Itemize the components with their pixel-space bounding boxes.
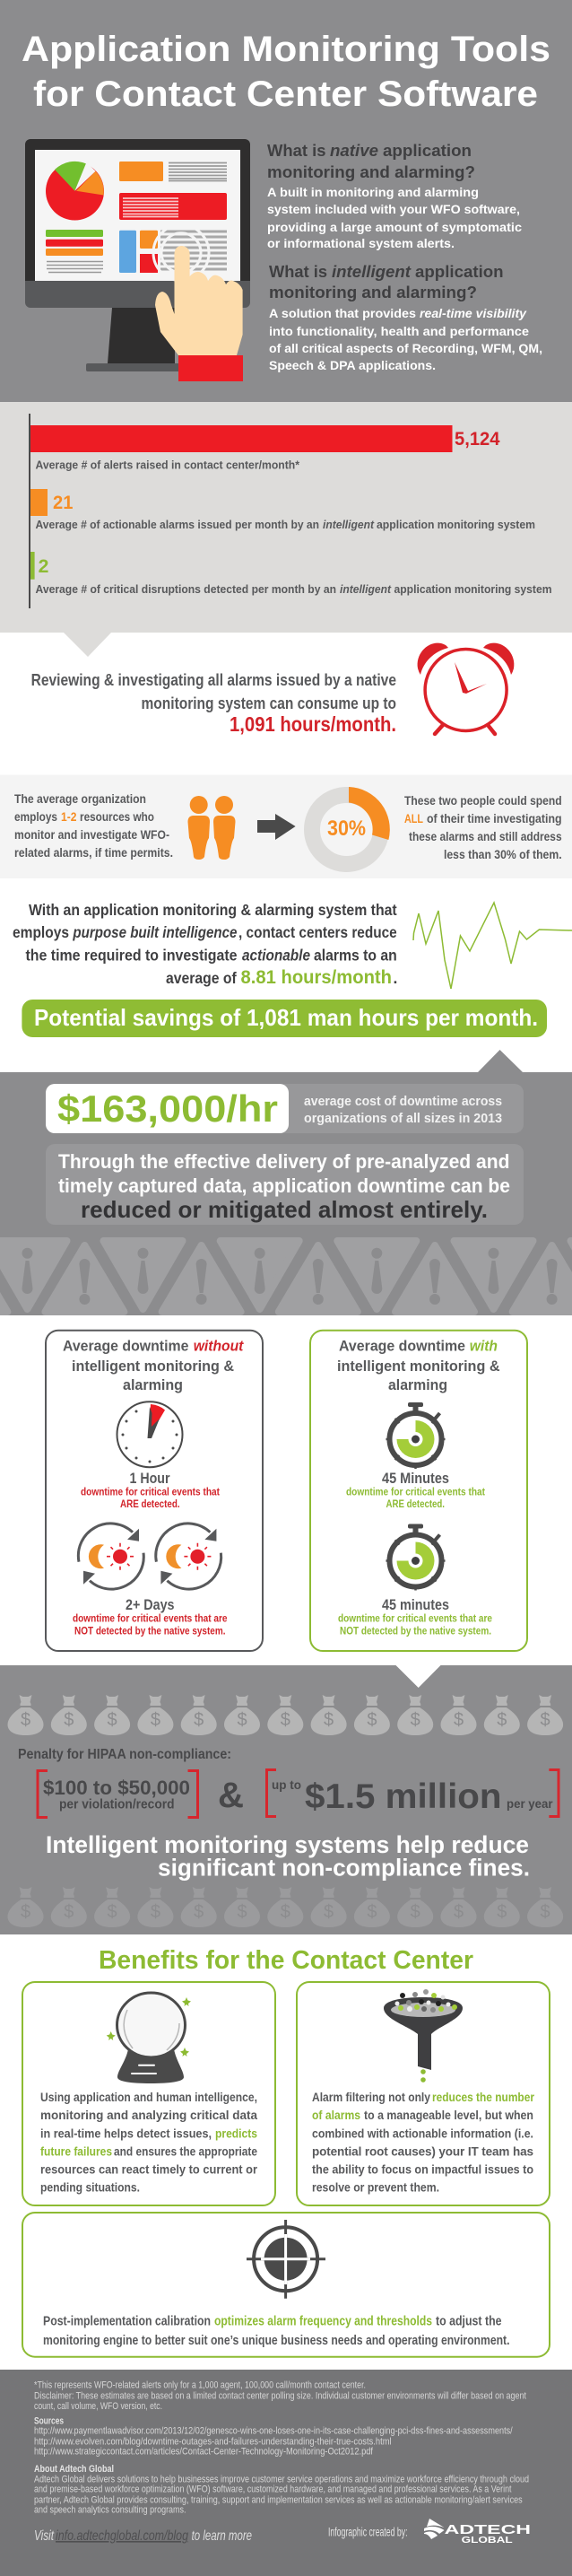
text block: what is intelligent: application: [415, 263, 504, 281]
pattern: money bags bottom row: $: [281, 1902, 290, 1922]
pattern: money bags top row: [7, 1695, 563, 1735]
text: reduces alarms: the ability to focus on impactful issues to: [312, 2163, 533, 2177]
pattern: money bags top row: $: [497, 1710, 507, 1730]
text: two people could spend: [404, 794, 562, 861]
pattern: money bags bottom row: [7, 1887, 563, 1927]
pattern: money bags top row: $: [21, 1710, 30, 1730]
title: [22, 30, 550, 114]
callout: reduced or mitigated: Through the effective delivery of pre-analyzed and: [58, 1150, 509, 1173]
text: human intelligence: and ensures the appropriate: [114, 2145, 257, 2159]
statement: reduce fines: significant non-compliance fines.: [158, 1855, 530, 1882]
text block: purpose built intelligence: the time required to investigate: [25, 947, 238, 965]
text: reduces alarms: potential root causes) your IT team has: [312, 2145, 533, 2159]
text: reduces alarms: reduces the number: [432, 2091, 535, 2104]
ampersand: &: [218, 1776, 244, 1815]
callout: reduced or mitigated: reduced or mitigated almost entirely.: [81, 1196, 488, 1223]
text: human intelligence: Using application and human intelligence,: [40, 2091, 257, 2104]
heading: without: [194, 1338, 245, 1355]
text: two people could spend: less than 30% of them.: [444, 848, 562, 861]
bar: 21 actionable alarms: Average # of actionable alarms issued per month by an: [36, 518, 319, 531]
pattern: money bags bottom row: $: [194, 1902, 204, 1922]
bar: 21 actionable alarms: intelligent: [323, 518, 375, 531]
sources text: [34, 2416, 513, 2458]
pattern: money bags top row: $: [194, 1710, 204, 1730]
text: post-implementation calibration: optimizes alarm frequency and thresholds: [214, 2314, 432, 2329]
stat: per violation penalty: per violation/record: [59, 1798, 174, 1812]
pattern: money bags bottom row: $: [454, 1902, 464, 1922]
text: human intelligence: predicts: [215, 2127, 257, 2141]
about text: [34, 2464, 529, 2516]
pattern: money bags top row: $: [108, 1710, 117, 1730]
title: for Contact Center Software: [33, 74, 538, 114]
text: reduces alarms: of alarms: [312, 2109, 360, 2122]
pattern: money bags top row: $: [281, 1710, 290, 1730]
text block: purpose built intelligence: .: [393, 969, 397, 987]
stat: per year penalty: per year: [507, 1796, 553, 1811]
text: reduces alarms: combined with actionable information (i.e.: [312, 2127, 533, 2141]
text block: what is intelligent: What is: [269, 263, 327, 281]
stat: per year penalty: up to: [272, 1778, 301, 1792]
text block: purpose built intelligence: average of: [166, 969, 237, 987]
text block: what is intelligent: real-time visibility: [420, 306, 527, 320]
panel: calibration: [22, 2213, 550, 2357]
heading: alarming: [123, 1376, 183, 1393]
pattern: money bags top row: $: [454, 1710, 464, 1730]
text: reduces alarms: [312, 2091, 535, 2195]
arrow: [257, 814, 296, 840]
stat: 2+ days: NOT detected by the native system.: [74, 1627, 226, 1637]
text: post-implementation calibration: Post-implementation calibration: [43, 2314, 211, 2329]
icon: two day-night cycles: [78, 1524, 221, 1589]
call to action: info.adtechglobal.com/blog: [56, 2528, 188, 2544]
text: two people could spend: ALL: [404, 812, 423, 825]
callout: 163,000 per hour: organizations of all sizes in 2013: [304, 1111, 502, 1126]
text block: what is intelligent: Speech & DPA applications.: [269, 358, 436, 372]
pattern: money bags bottom row: $: [151, 1902, 160, 1922]
bar: 2 critical disruptions: Average # of critical disruptions detected per month by an: [36, 582, 336, 596]
stat: 45 minutes not detected: NOT detected by the native system.: [340, 1627, 491, 1637]
text: reduces alarms: resolve or prevent them.: [312, 2181, 439, 2195]
bar: 5,124 alerts: Average # of alerts raised in contact center/month*: [36, 458, 300, 472]
text block: what is native: What is: [267, 142, 326, 160]
text: two people could spend: of their time investigating: [427, 812, 562, 825]
stat: 1 hour: [81, 1470, 220, 1510]
pattern: money bags top row: $: [237, 1710, 247, 1730]
stat: per violation penalty: $100 to $50,000: [43, 1777, 190, 1799]
section: header background: [0, 0, 572, 402]
sources text: Sources: [34, 2416, 64, 2427]
stat: 1 hour: 1 Hour: [129, 1470, 170, 1487]
callout: 163,000 per hour: $163,000/hr: [57, 1087, 278, 1130]
callout: reduced or mitigated: timely captured data, application downtime can be: [58, 1174, 510, 1197]
logo: Adtech Global: GLOBAL: [462, 2535, 513, 2545]
statement: reduce fines: Intelligent monitoring systems help reduce: [46, 1831, 529, 1858]
text block: 1,091 hours: [31, 671, 396, 736]
stat: 45 minutes not detected: 45 minutes: [382, 1596, 449, 1613]
text block: what is native: native: [330, 142, 378, 160]
pattern: money bags bottom row: $: [367, 1902, 377, 1922]
text: average organization: monitor and investigate WFO-: [14, 828, 169, 842]
panel: downtime with intelligent monitoring: [310, 1331, 527, 1651]
stat: 2+ days: 2+ Days: [126, 1596, 174, 1613]
text block: purpose built intelligence: With an application monitoring & alarming system that: [29, 901, 397, 919]
panel: alarm filtering: [297, 1982, 550, 2205]
sources text: http://www.evolven.com/blog/downtime-outages-and-failures-understanding-their-true-costs.html: [34, 2437, 392, 2448]
text block: what is native: providing a large amount of symptomatic: [267, 220, 522, 234]
heading: with: [470, 1338, 498, 1355]
text block: what is native: or informational system alerts.: [267, 236, 455, 250]
text block: 1,091 hours: 1,091 hours/month.: [230, 712, 396, 736]
stat: 1 hour: downtime for critical events that: [81, 1488, 220, 1498]
panel: downtime without intelligent monitoring: [46, 1331, 263, 1651]
icon: wall clock one hour: [117, 1402, 183, 1467]
heading: intelligent monitoring &: [337, 1358, 500, 1375]
heading: intelligent monitoring &: [72, 1358, 234, 1375]
chart: 30 percent donut: [312, 787, 390, 864]
pattern: money bags bottom row: $: [21, 1902, 30, 1922]
text: human intelligence: pending situations.: [40, 2181, 140, 2195]
stat: 1 hour: ARE detected.: [120, 1499, 180, 1510]
panel: alert volume bar chart: [0, 402, 572, 657]
heading: Average downtime: [339, 1338, 465, 1355]
panel: HIPAA penalties: [0, 1665, 572, 1934]
pattern: money bags top row: $: [541, 1710, 550, 1730]
bar: 21 actionable alarms: 21: [53, 493, 74, 513]
text block: what is intelligent: A solution that provides: [269, 306, 416, 320]
bar: 2 critical disruptions: 2: [39, 556, 48, 577]
icon: stopwatch 45 minutes second: [386, 1524, 445, 1590]
panel: predict failures: [22, 1982, 275, 2205]
text block: purpose built intelligence: alarms to an: [314, 947, 397, 965]
panel: cost of downtime: [0, 1050, 572, 1315]
banner: potential savings: [22, 1000, 547, 1037]
pattern: money bags bottom row: $: [237, 1902, 247, 1922]
pattern: money bags top row: $: [151, 1710, 160, 1730]
stat: 2+ days: [73, 1596, 228, 1637]
heading: Average downtime: [63, 1338, 188, 1355]
pattern: money bags top row: $: [367, 1710, 377, 1730]
heading: benefits: Benefits for the Contact Center: [99, 1946, 473, 1975]
text: post-implementation calibration: to adjust the: [436, 2314, 502, 2329]
pattern: money bags top row: $: [324, 1710, 334, 1730]
text block: purpose built intelligence: employs: [13, 923, 69, 941]
bar: 2 critical disruptions: intelligent: [340, 582, 392, 596]
icon: funnel: [384, 1989, 463, 2083]
text: human intelligence: in real-time helps detect issues,: [40, 2127, 212, 2141]
stat: 45 minutes not detected: downtime for critical events that are: [338, 1614, 492, 1625]
stat: per year penalty: $1.5 million: [305, 1777, 502, 1816]
heading: [337, 1338, 500, 1393]
text block: what is intelligent: of all critical aspects of Recording, WFM, QM,: [269, 341, 542, 355]
text: average organization: The average organization: [14, 792, 146, 806]
stat: 45 minutes detected: [346, 1470, 485, 1510]
text block: 1,091 hours: Reviewing & investigating all alarms issued by a native: [31, 671, 396, 689]
text: average organization: resources who: [80, 810, 154, 824]
banner: potential savings: Potential savings of 1,081 man hours per month.: [34, 1004, 538, 1031]
pattern: money bags bottom row: $: [64, 1902, 74, 1922]
logo: Adtech Global: ADTECH: [445, 2522, 531, 2537]
pattern: money bags bottom row: $: [541, 1902, 550, 1922]
text block: what is intelligent: [269, 263, 542, 372]
text: average organization: employs: [14, 810, 57, 824]
text block: what is native: monitoring and alarming?: [267, 163, 475, 181]
text: average organization: [14, 792, 173, 860]
icon: alarm clock: [418, 643, 514, 734]
text: average organization: 1-2: [61, 810, 77, 824]
stat: 45 minutes detected: 45 Minutes: [382, 1470, 449, 1487]
callout: 163,000 per hour: [46, 1084, 524, 1133]
call to action: Visit: [34, 2528, 54, 2544]
bar: 21 actionable alarms: [30, 489, 535, 531]
bar: 2 critical disruptions: [30, 552, 552, 596]
icon: monitor with touching hand: [25, 139, 250, 381]
text block: purpose built intelligence: , contact centers reduce: [238, 923, 397, 941]
call to action: to learn more: [192, 2528, 252, 2544]
icon: stopwatch 45 minutes: [386, 1402, 445, 1469]
pattern: money bags top row: $: [411, 1710, 420, 1730]
chart: 30 percent donut: 30%: [327, 816, 366, 841]
about text: About Adtech Global: [34, 2464, 114, 2475]
text block: what is native: system included with your WFO software,: [267, 202, 520, 216]
sources text: http://www.strategiccontact.com/articles/Contact-Center-Technology-Monitoring-Oct2012.pdf: [34, 2447, 374, 2458]
heading: [63, 1338, 245, 1393]
panel: staffing and 30 percent: [0, 775, 572, 878]
stat: 45 minutes detected: downtime for critical events that: [346, 1488, 485, 1498]
stat: per violation penalty: [38, 1771, 197, 1818]
logo: Adtech Global: [424, 2519, 531, 2545]
bar: 21 actionable alarms: application monitoring system: [377, 518, 535, 531]
stat: 45 minutes not detected: [338, 1596, 492, 1637]
bar: 5,124 alerts: [30, 425, 500, 472]
text block: what is native: [267, 142, 522, 250]
pattern: warning triangles: [0, 1241, 572, 1312]
pattern: money bags bottom row: $: [324, 1902, 334, 1922]
icon: target crosshair: [247, 2220, 325, 2299]
text: post-implementation calibration: [43, 2314, 509, 2348]
chart: heartbeat line: [413, 903, 572, 989]
text block: purpose built intelligence: actionable: [242, 947, 310, 965]
stat: 2+ days: downtime for critical events that are: [73, 1614, 228, 1625]
icon: crystal ball: [107, 1993, 191, 2083]
text: reduces alarms: Alarm filtering not only: [312, 2091, 430, 2104]
text block: what is intelligent: monitoring and alarming?: [269, 284, 477, 301]
pattern: money bags bottom row: $: [411, 1902, 420, 1922]
text: human intelligence: resources can react timely to current or: [40, 2163, 258, 2177]
text block: purpose built intelligence: 8.81 hours/month: [240, 967, 392, 988]
heading: alarming: [388, 1376, 447, 1393]
icon: two people: [188, 796, 235, 860]
pattern: money bags bottom row: $: [108, 1902, 117, 1922]
text block: what is intelligent: intelligent: [332, 263, 412, 281]
stat: 45 minutes detected: ARE detected.: [386, 1499, 445, 1510]
bar: 5,124 alerts: 5,124: [455, 429, 500, 450]
text block: what is native: A built in monitoring and alarming: [267, 185, 479, 199]
text: human intelligence: [40, 2091, 258, 2195]
text block: what is intelligent: into functionality, health and performance: [269, 324, 529, 338]
label: penalty heading: Penalty for HIPAA non-compliance:: [18, 1747, 231, 1762]
text block: purpose built intelligence: purpose built intelligence: [73, 923, 238, 941]
text block: 1,091 hours: monitoring system can consume up to: [142, 694, 396, 712]
pattern: money bags top row: $: [64, 1710, 74, 1730]
text block: what is native: application: [383, 142, 472, 160]
text: human intelligence: future failures: [40, 2145, 112, 2159]
credit text: Infographic created by:: [328, 2525, 407, 2539]
callout: 163,000 per hour: average cost of downtime across: [304, 1094, 502, 1109]
disclaimer text: *This represents WFO-related alerts only for a 1,000 agent, 100,000 call/month contact center.: [34, 2380, 366, 2391]
text block: purpose built intelligence: [13, 901, 397, 988]
callout: reduced or mitigated: [46, 1144, 524, 1225]
title: Application Monitoring Tools: [22, 30, 550, 69]
text: average organization: related alarms, if time permits.: [14, 846, 173, 860]
disclaimer text: [34, 2380, 526, 2412]
pattern: money bags bottom row: $: [497, 1902, 507, 1922]
bar: 2 critical disruptions: application monitoring system: [394, 582, 552, 596]
text: human intelligence: monitoring and analyzing critical data: [40, 2109, 257, 2122]
disclaimer text: count, call volume, WFO version, etc.: [34, 2401, 162, 2412]
text: reduces alarms: to a manageable level, but when: [364, 2109, 533, 2122]
statement: reduce fines: [46, 1831, 530, 1882]
stat: per year penalty: [267, 1769, 559, 1816]
about text: and speech analytics consulting programs.: [34, 2505, 186, 2516]
footer panel: [0, 2370, 572, 2576]
